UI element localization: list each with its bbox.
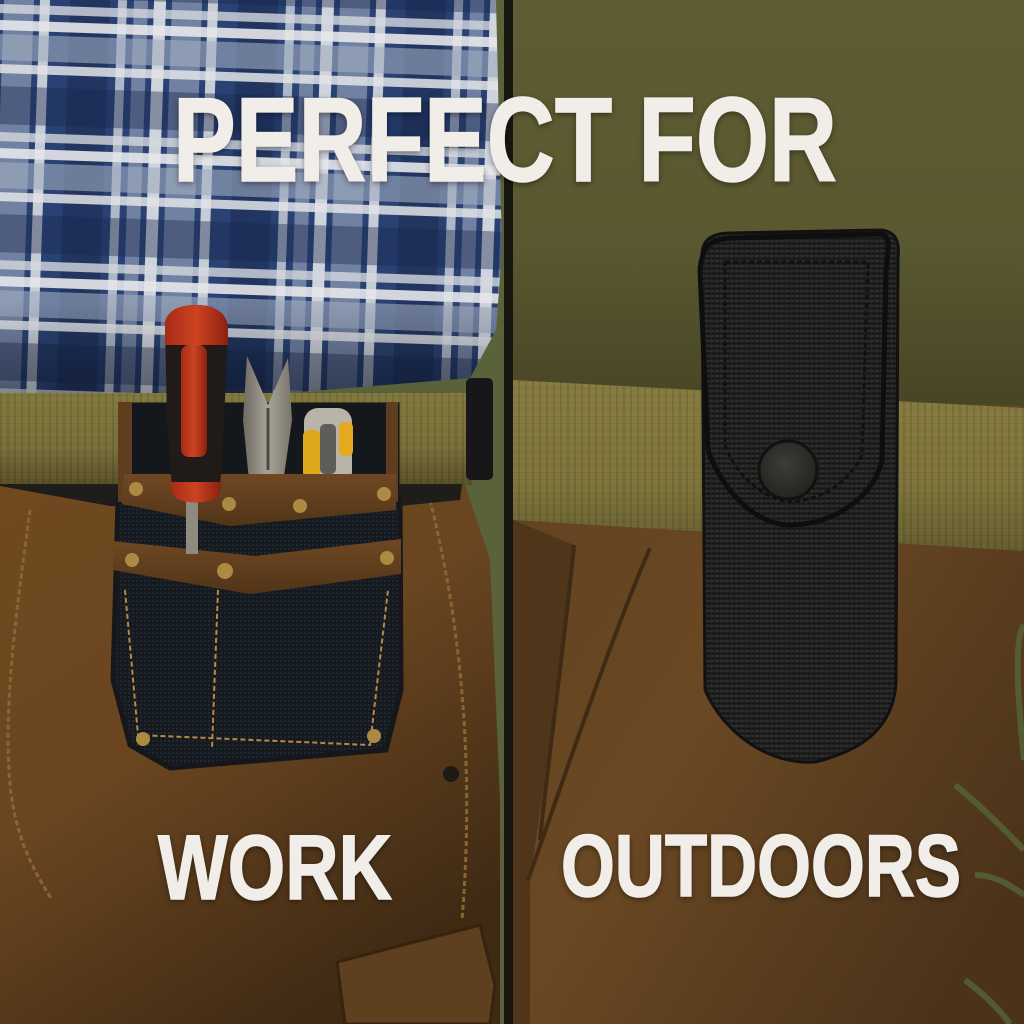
brass rivets (125, 482, 394, 746)
olive belt (513, 380, 1024, 551)
trouser pocket seams (528, 545, 650, 880)
pouch back (122, 404, 398, 510)
belt: left (0, 378, 493, 506)
brown work trousers (0, 485, 500, 1024)
tools: pliers and tape (243, 356, 353, 490)
lower leather strap (113, 539, 401, 594)
trouser seam (8, 500, 467, 920)
panel: outdoors (513, 0, 1024, 1024)
snap button (759, 441, 817, 499)
label: work: WORK (158, 817, 392, 919)
flap stitching (725, 262, 868, 502)
panel: work (0, 0, 505, 1024)
black nylon sheath (700, 230, 898, 762)
divider (504, 0, 513, 1024)
upper leather strap (122, 474, 396, 526)
plaid shirt (0, 0, 502, 400)
title: PERFECT FOR (173, 73, 837, 207)
olive shirt (513, 0, 1024, 405)
cargo pocket (337, 925, 495, 1024)
trouser pocket shade (513, 520, 574, 1024)
trouser rivet (443, 766, 459, 782)
screwdriver (165, 305, 228, 554)
pouch stitching (125, 590, 388, 748)
shirt shadow (0, 0, 502, 400)
grass blades (955, 625, 1024, 1024)
sheath flap (700, 234, 888, 525)
tool pouch (113, 402, 401, 768)
